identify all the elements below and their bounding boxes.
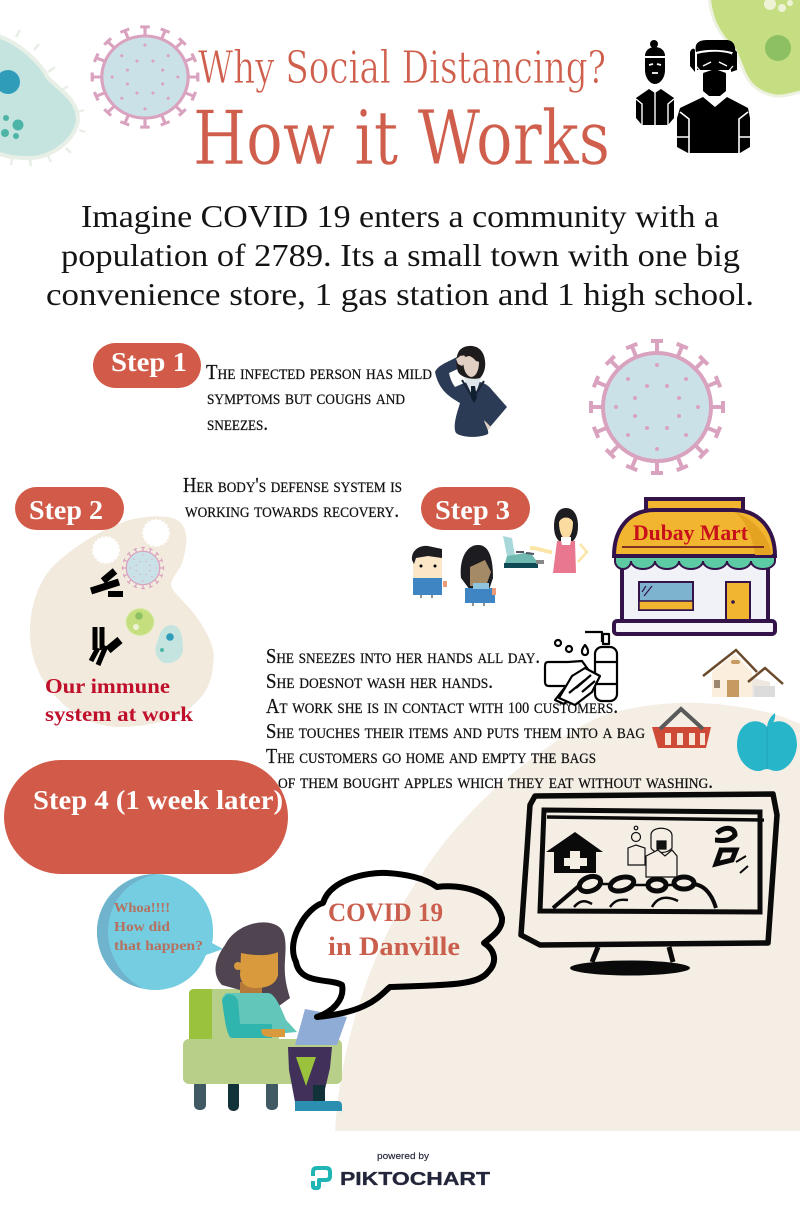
step 2 badge: Step 2 [29, 495, 103, 525]
immune caption [45, 674, 193, 726]
squiggle marks [715, 828, 748, 873]
right worker [677, 40, 750, 153]
illustration: woman on armchair with laptop [183, 922, 347, 1111]
step 2 badge [15, 487, 124, 530]
icon: title virus [92, 27, 198, 127]
icon: Dubay Mart store [614, 499, 775, 634]
intro text: Imagine COVID 19 enters a community with a [81, 198, 719, 234]
store name: Dubay Mart [633, 520, 749, 545]
icon: hospital building [546, 832, 603, 873]
speech bubble: Whoa: How did [114, 919, 171, 934]
icon: white spiky cells [93, 520, 169, 563]
icon: two masked medical workers [636, 40, 750, 153]
step 3 badge [421, 487, 530, 530]
step 3 text: She touches their items and puts them into a bag [266, 719, 645, 743]
panel: immune system at work [30, 516, 214, 727]
footer: powered by Piktochart: PIKTOCHART [340, 1168, 491, 1189]
step 1 text: sneezes. [207, 411, 268, 435]
title: Why Social Distancing? [198, 41, 606, 94]
left worker [636, 40, 674, 125]
icon: hand washing [545, 632, 617, 705]
icon: antibody two [91, 627, 120, 665]
speech cloud: COVID 19 in Danville: in Danville [328, 932, 460, 961]
icon: boy customer [412, 546, 447, 598]
icon: teal cell [155, 625, 183, 663]
icon: small medical workers [628, 826, 677, 877]
step 1 text: The infected person has mild [206, 360, 432, 384]
icon: woman with headache [435, 346, 507, 437]
step 3 text: She doesnot wash her hands. [266, 669, 493, 693]
glasses and hills [553, 874, 716, 908]
step 2 text: working towards recovery. [185, 498, 399, 522]
footer: powered by Piktochart: powered by [377, 1151, 429, 1162]
speech bubble: Whoa: Whoa!!!! [114, 900, 170, 915]
immune blob [30, 516, 214, 727]
intro text: convenience store, 1 gas station and 1 high school. [46, 276, 754, 312]
background shape: beige curve [335, 703, 800, 1131]
step 1 text [206, 360, 432, 435]
intro text [46, 198, 754, 312]
icon: houses [703, 650, 783, 697]
icon: antibody one [91, 571, 123, 594]
step 3 text: The customers go home and empty the bags [266, 744, 596, 768]
step 3 text: of them bought apples which they eat without washing. [278, 769, 713, 793]
icon: girl customer [461, 545, 496, 606]
icon: apple [737, 713, 797, 771]
icon: Piktochart logo [313, 1168, 330, 1188]
speech cloud: COVID 19 in Danville: COVID 19 [328, 898, 443, 927]
step 3 text: She sneezes into her hands all day. [266, 644, 540, 668]
step 3 badge: Step 3 [435, 495, 510, 525]
step 1 badge [93, 343, 201, 388]
step 3 text: At work she is in contact with 100 customers. [266, 694, 618, 718]
icon: green cell [126, 608, 154, 636]
step 1 badge: Step 1 [111, 347, 187, 377]
immune caption: Our immune [45, 674, 170, 698]
speech bubble: Whoa: that happen? [114, 938, 203, 953]
step 4 badge: Step 4 (1 week later) [33, 785, 283, 815]
title: How it Works [193, 94, 610, 182]
icon: large virus [591, 341, 723, 473]
speech bubble: Whoa [97, 874, 223, 990]
step 1 text: symptoms but coughs and [207, 385, 405, 409]
step 2 text: Her body's defense system is [183, 473, 402, 497]
title [193, 41, 610, 182]
step 3 text [266, 644, 713, 793]
footer: powered by Piktochart [313, 1151, 491, 1189]
icon: teal germ cell, top left [0, 30, 85, 166]
intro text: population of 2789. Its a small town with one big [61, 237, 740, 273]
icon: basket [652, 709, 711, 748]
step 4 badge [4, 760, 288, 874]
immune caption: system at work [45, 702, 193, 726]
icon: cashier woman [553, 508, 587, 573]
step 2 text [183, 473, 402, 522]
icon: monitor with hospital scene [521, 794, 777, 976]
icon: small virus [123, 548, 163, 588]
speech cloud: COVID 19 in Danville [293, 873, 502, 1017]
icon: cash register [503, 536, 552, 568]
icon: green germ cell, top right [709, 0, 800, 96]
